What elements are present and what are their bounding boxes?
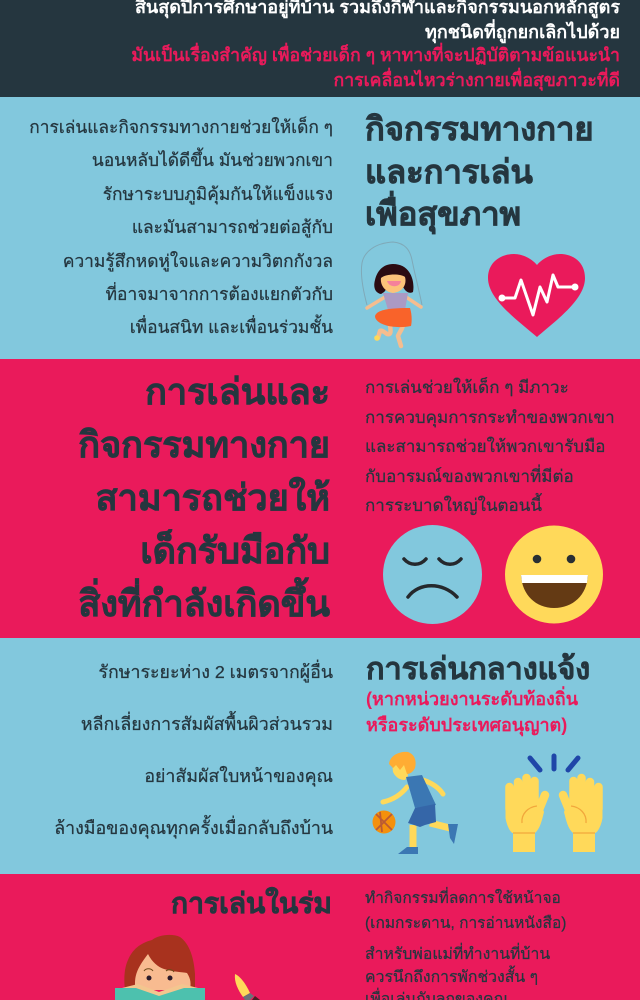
heading: สามารถช่วยให้ bbox=[96, 477, 330, 518]
header text: pink: การเคลื่อนไหวร่างกายเพื่อสุขภาวะที่ดี bbox=[333, 70, 620, 90]
rule list: อย่าสัมผัสใบหน้าของคุณ bbox=[144, 766, 333, 786]
body text: ทำกิจกรรมที่ลดการใช้หน้าจอ bbox=[365, 890, 561, 907]
heading: เพื่อสุขภาพ bbox=[365, 195, 521, 232]
sparkle lines bbox=[530, 756, 578, 770]
heading: กิจกรรมทางกาย bbox=[78, 424, 330, 465]
panel: play helps children cope bbox=[0, 359, 640, 638]
body text bbox=[365, 886, 566, 932]
body text: parents: ควรนึกถึงการพักช่วงสั้น ๆ bbox=[365, 968, 538, 986]
body text: ที่อาจมาจากการต้องแยกตัวกับ bbox=[106, 284, 333, 304]
rule list: ล้างมือของคุณทุกครั้งเมื่อกลับถึงบ้าน bbox=[54, 818, 333, 838]
heading: การเล่นกลางแจ้ง bbox=[366, 652, 590, 686]
body text: ความรู้สึกหดหู่ใจและความวิตกกังวล bbox=[63, 251, 333, 271]
body text: เพื่อนสนิท และเพื่อนร่วมชั้น bbox=[130, 317, 333, 337]
body text: (เกมกระดาน, การอ่านหนังสือ) bbox=[365, 915, 566, 932]
heading: เด็กรับมือกับ bbox=[140, 530, 330, 571]
body text: parents: สำหรับพ่อแม่ที่ทำงานที่บ้าน bbox=[365, 946, 550, 963]
icon: heart with pulse bbox=[488, 254, 585, 337]
icon: crayon bbox=[234, 974, 260, 1000]
body text: นอนหลับได้ดีขึ้น มันช่วยพวกเขา bbox=[92, 150, 333, 170]
icon: raised hands bbox=[505, 754, 603, 852]
subheading: หรือระดับประเทศอนุญาต) bbox=[366, 715, 567, 735]
heading: การเล่นและ bbox=[145, 371, 330, 412]
heading bbox=[78, 371, 330, 624]
icon: sad face bbox=[383, 525, 482, 624]
rule list bbox=[54, 660, 333, 839]
rule list: รักษาระยะห่าง 2 เมตรจากผู้อื่น bbox=[98, 662, 333, 682]
body text: รักษาระบบภูมิคุ้มกันให้แข็งแรง bbox=[103, 184, 333, 204]
heading: การเล่นในร่ม bbox=[171, 887, 332, 919]
panel: physical activity for health bbox=[0, 97, 640, 359]
body text: การเล่นและกิจกรรมทางกายช่วยให้เด็ก ๆ bbox=[29, 117, 333, 137]
heading: สิ่งที่กำลังเกิดขึ้น bbox=[78, 583, 330, 624]
icon: child reading book bbox=[115, 934, 205, 1000]
body text: การเล่นช่วยให้เด็ก ๆ มีภาวะ bbox=[365, 378, 569, 397]
icon: child dribbling ball bbox=[372, 752, 458, 854]
icon: girl skipping rope bbox=[361, 242, 423, 348]
rule list: หลีกเลี่ยงการสัมผัสพื้นผิวส่วนรวม bbox=[81, 714, 333, 734]
body text bbox=[365, 377, 615, 516]
header text: pink bbox=[131, 42, 620, 91]
body text bbox=[29, 116, 333, 337]
heading: กิจกรรมทางกาย bbox=[365, 110, 594, 147]
subheading bbox=[366, 686, 578, 736]
header text: white: ทุกชนิดที่ถูกยกเลิกไปด้วย bbox=[425, 22, 620, 42]
body text: การควบคุมการกระทำของพวกเขา bbox=[365, 408, 615, 426]
left hand bbox=[506, 778, 545, 852]
body text: การระบาดใหญ่ในตอนนี้ bbox=[365, 496, 542, 515]
subheading: (หากหน่วยงานระดับท้องถิ่น bbox=[366, 689, 578, 709]
body text: parents bbox=[365, 942, 550, 1000]
panel: header bbox=[0, 0, 640, 97]
icon: laughing face bbox=[505, 526, 603, 624]
header text: pink: มันเป็นเรื่องสำคัญ เพื่อช่วยเด็ก ๆ หาทางที่จะปฏิบัติตามข้อแนะนำ bbox=[131, 45, 620, 65]
body text: และสามารถช่วยให้พวกเขารับมือ bbox=[365, 437, 606, 456]
heading: และการเล่น bbox=[365, 152, 533, 190]
panel: outdoor play bbox=[0, 638, 640, 874]
panel: indoor play bbox=[0, 874, 640, 1000]
header text: white bbox=[135, 0, 620, 44]
body text: และมันสามารถช่วยต่อสู้กับ bbox=[132, 217, 333, 237]
heading bbox=[365, 110, 594, 234]
body text: กับอารมณ์ของพวกเขาที่มีต่อ bbox=[365, 466, 574, 486]
right hand bbox=[563, 778, 602, 852]
